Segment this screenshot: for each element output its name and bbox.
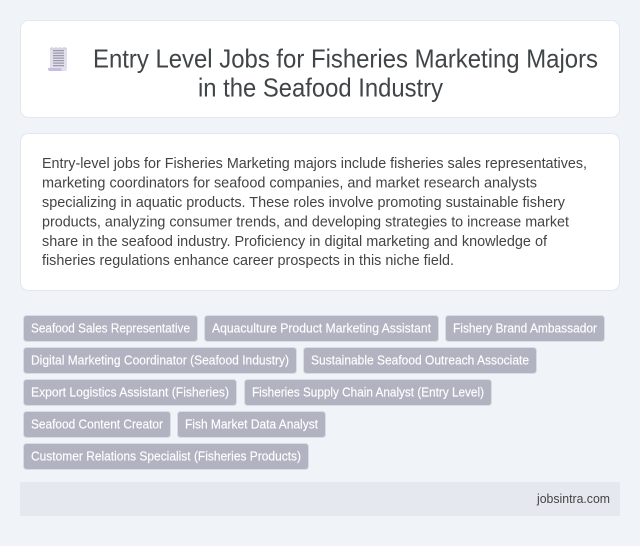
- title: [93, 44, 598, 102]
- tag: Customer Relations Specialist: [24, 444, 308, 470]
- tag: Fisheries Supply Chain Analyst: Fisheries Supply Chain Analyst (Entry Level): [252, 384, 484, 400]
- text block: description: share in the seafood industry. Proficiency in digital marketing and knowledge of: [42, 233, 548, 250]
- text block: description: specializing in aquatic products. These roles involve promoting sustainable fishery: [42, 194, 565, 211]
- panel: description: [20, 134, 620, 290]
- tag: Seafood Sales Representative: Seafood Sales Representative: [31, 320, 190, 336]
- tag: Seafood Content Creator: Seafood Content Creator: [31, 416, 164, 432]
- text block: description: marketing coordinators for seafood companies, and market research analysts: [42, 174, 537, 192]
- tag: Sustainable Seafood Outreach Associate: Sustainable Seafood Outreach Associate: [311, 352, 529, 368]
- tag: Fish Market Data Analyst: [178, 412, 326, 438]
- tag: Fisheries Supply Chain Analyst: [244, 380, 492, 406]
- tag: Aquaculture Product Marketing Assistant: Aquaculture Product Marketing Assistant: [212, 320, 431, 336]
- tag: Seafood Content Creator: [24, 412, 170, 438]
- tag: Export Logistics Assistant: [24, 380, 236, 406]
- icon: document scroll: [48, 47, 67, 71]
- tag: Fishery Brand Ambassador: [446, 316, 604, 342]
- title: Entry Level Jobs for Fisheries Marketing Majors: [93, 44, 598, 74]
- tag: Digital Marketing Coordinator: Digital Marketing Coordinator (Seafood Industry): [31, 352, 289, 368]
- tag: Sustainable Seafood Outreach Associate: [304, 348, 536, 374]
- text block: description: products, analyzing consumer trends, and developing strategies to increase market: [42, 214, 570, 230]
- tag: Customer Relations Specialist: Customer Relations Specialist (Fisheries Products): [31, 448, 301, 464]
- tag: Export Logistics Assistant: Export Logistics Assistant (Fisheries): [31, 384, 229, 400]
- footer: [20, 482, 620, 516]
- text block: description: Entry-level jobs for Fisheries Marketing majors include fisheries sales representatives,: [42, 155, 587, 172]
- text block: description: [42, 155, 587, 269]
- tag: Seafood Sales Representative: [24, 316, 198, 342]
- tag: Fishery Brand Ambassador: Fishery Brand Ambassador: [453, 320, 598, 336]
- text block: description: fisheries regulations enhance career prospects in this niche field.: [42, 252, 454, 269]
- panel: header: [20, 20, 620, 118]
- title: in the Seafood Industry: [198, 72, 443, 102]
- tag list: job titles: [24, 316, 604, 470]
- footer text: site name: jobsintra.com: [536, 491, 610, 506]
- tag: Fish Market Data Analyst: Fish Market Data Analyst: [185, 416, 318, 432]
- tag: Aquaculture Product Marketing Assistant: [204, 316, 438, 342]
- tag: Digital Marketing Coordinator: [24, 348, 296, 374]
